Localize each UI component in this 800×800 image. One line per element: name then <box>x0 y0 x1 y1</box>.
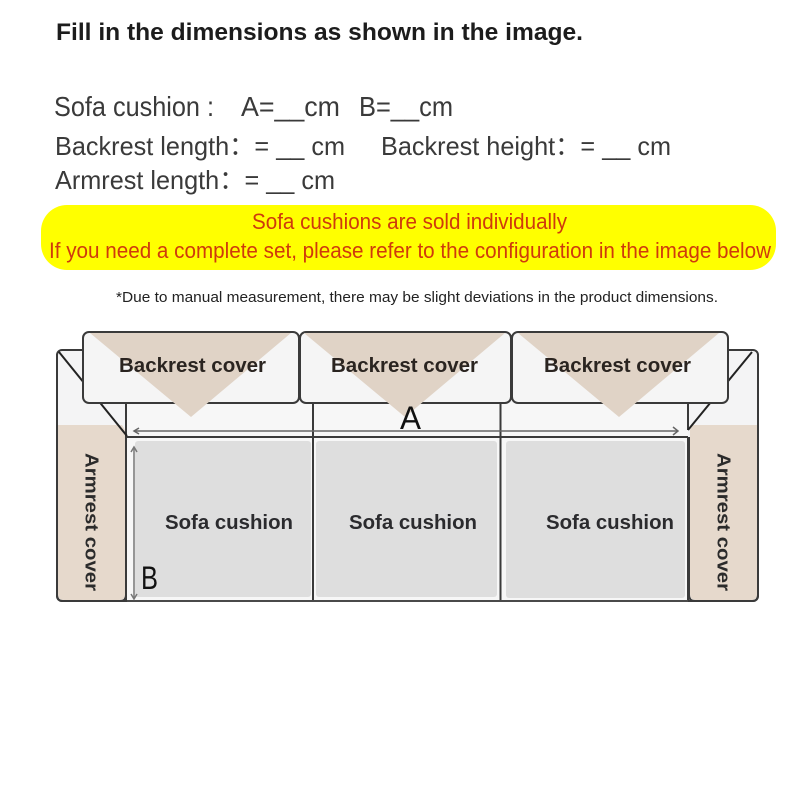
label: A: A <box>400 400 422 436</box>
panel: backrest cover 3 <box>512 332 728 417</box>
panel: left armrest cover: Armrest cover <box>82 453 102 591</box>
panel: sofa cushion 2 <box>316 441 497 597</box>
arrow: dimension A <box>134 427 678 435</box>
label: B: B <box>141 560 158 596</box>
title: Fill in the dimensions as shown in the image. <box>56 19 583 46</box>
panel: backrest cover 2 <box>300 332 511 417</box>
sofa diagram <box>57 332 758 601</box>
corner diagonals <box>59 352 752 436</box>
panel: right armrest cover: Armrest cover <box>714 453 734 591</box>
text block: dimension fields: Backrest length：= __ cm <box>55 131 345 161</box>
text block: dimension fields: A=__cm <box>241 91 340 122</box>
panel: backrest cover 1 <box>83 332 299 417</box>
panel: left armrest cover <box>57 425 126 601</box>
text block: dimension fields: Armrest length：= __ cm <box>55 165 335 195</box>
arrow: dimension B <box>131 447 137 599</box>
callout: sold individually <box>41 205 776 270</box>
panel: sofa cushion 3 <box>506 441 685 598</box>
sofa frame <box>57 350 758 601</box>
panel: sofa cushion 1 <box>135 441 311 597</box>
text block: dimension fields: Backrest height：= __ cm <box>381 131 671 161</box>
panel: right armrest cover <box>689 425 758 601</box>
text block: dimension fields <box>54 91 671 195</box>
panel: backrest cover 1: Backrest cover <box>119 354 266 377</box>
panel: sofa cushion 3: Sofa cushion <box>546 512 674 534</box>
panel: backrest cover 3: Backrest cover <box>544 354 691 377</box>
text block: dimension fields: B=__cm <box>359 91 453 122</box>
panel: sofa cushion 2: Sofa cushion <box>349 512 477 534</box>
callout: sold individually: Sofa cushions are sold individually <box>252 209 567 234</box>
callout: sold individually: If you need a complete set, please refer to the configuration in the image below <box>49 238 771 263</box>
panel: backrest cover 2: Backrest cover <box>331 354 478 377</box>
panel: sofa cushion 1: Sofa cushion <box>165 512 293 534</box>
bottom edge <box>127 600 688 602</box>
text block: dimension fields: Sofa cushion : <box>54 91 214 122</box>
footnote: *Due to manual measurement, there may be slight deviations in the product dimensions. <box>116 290 718 306</box>
